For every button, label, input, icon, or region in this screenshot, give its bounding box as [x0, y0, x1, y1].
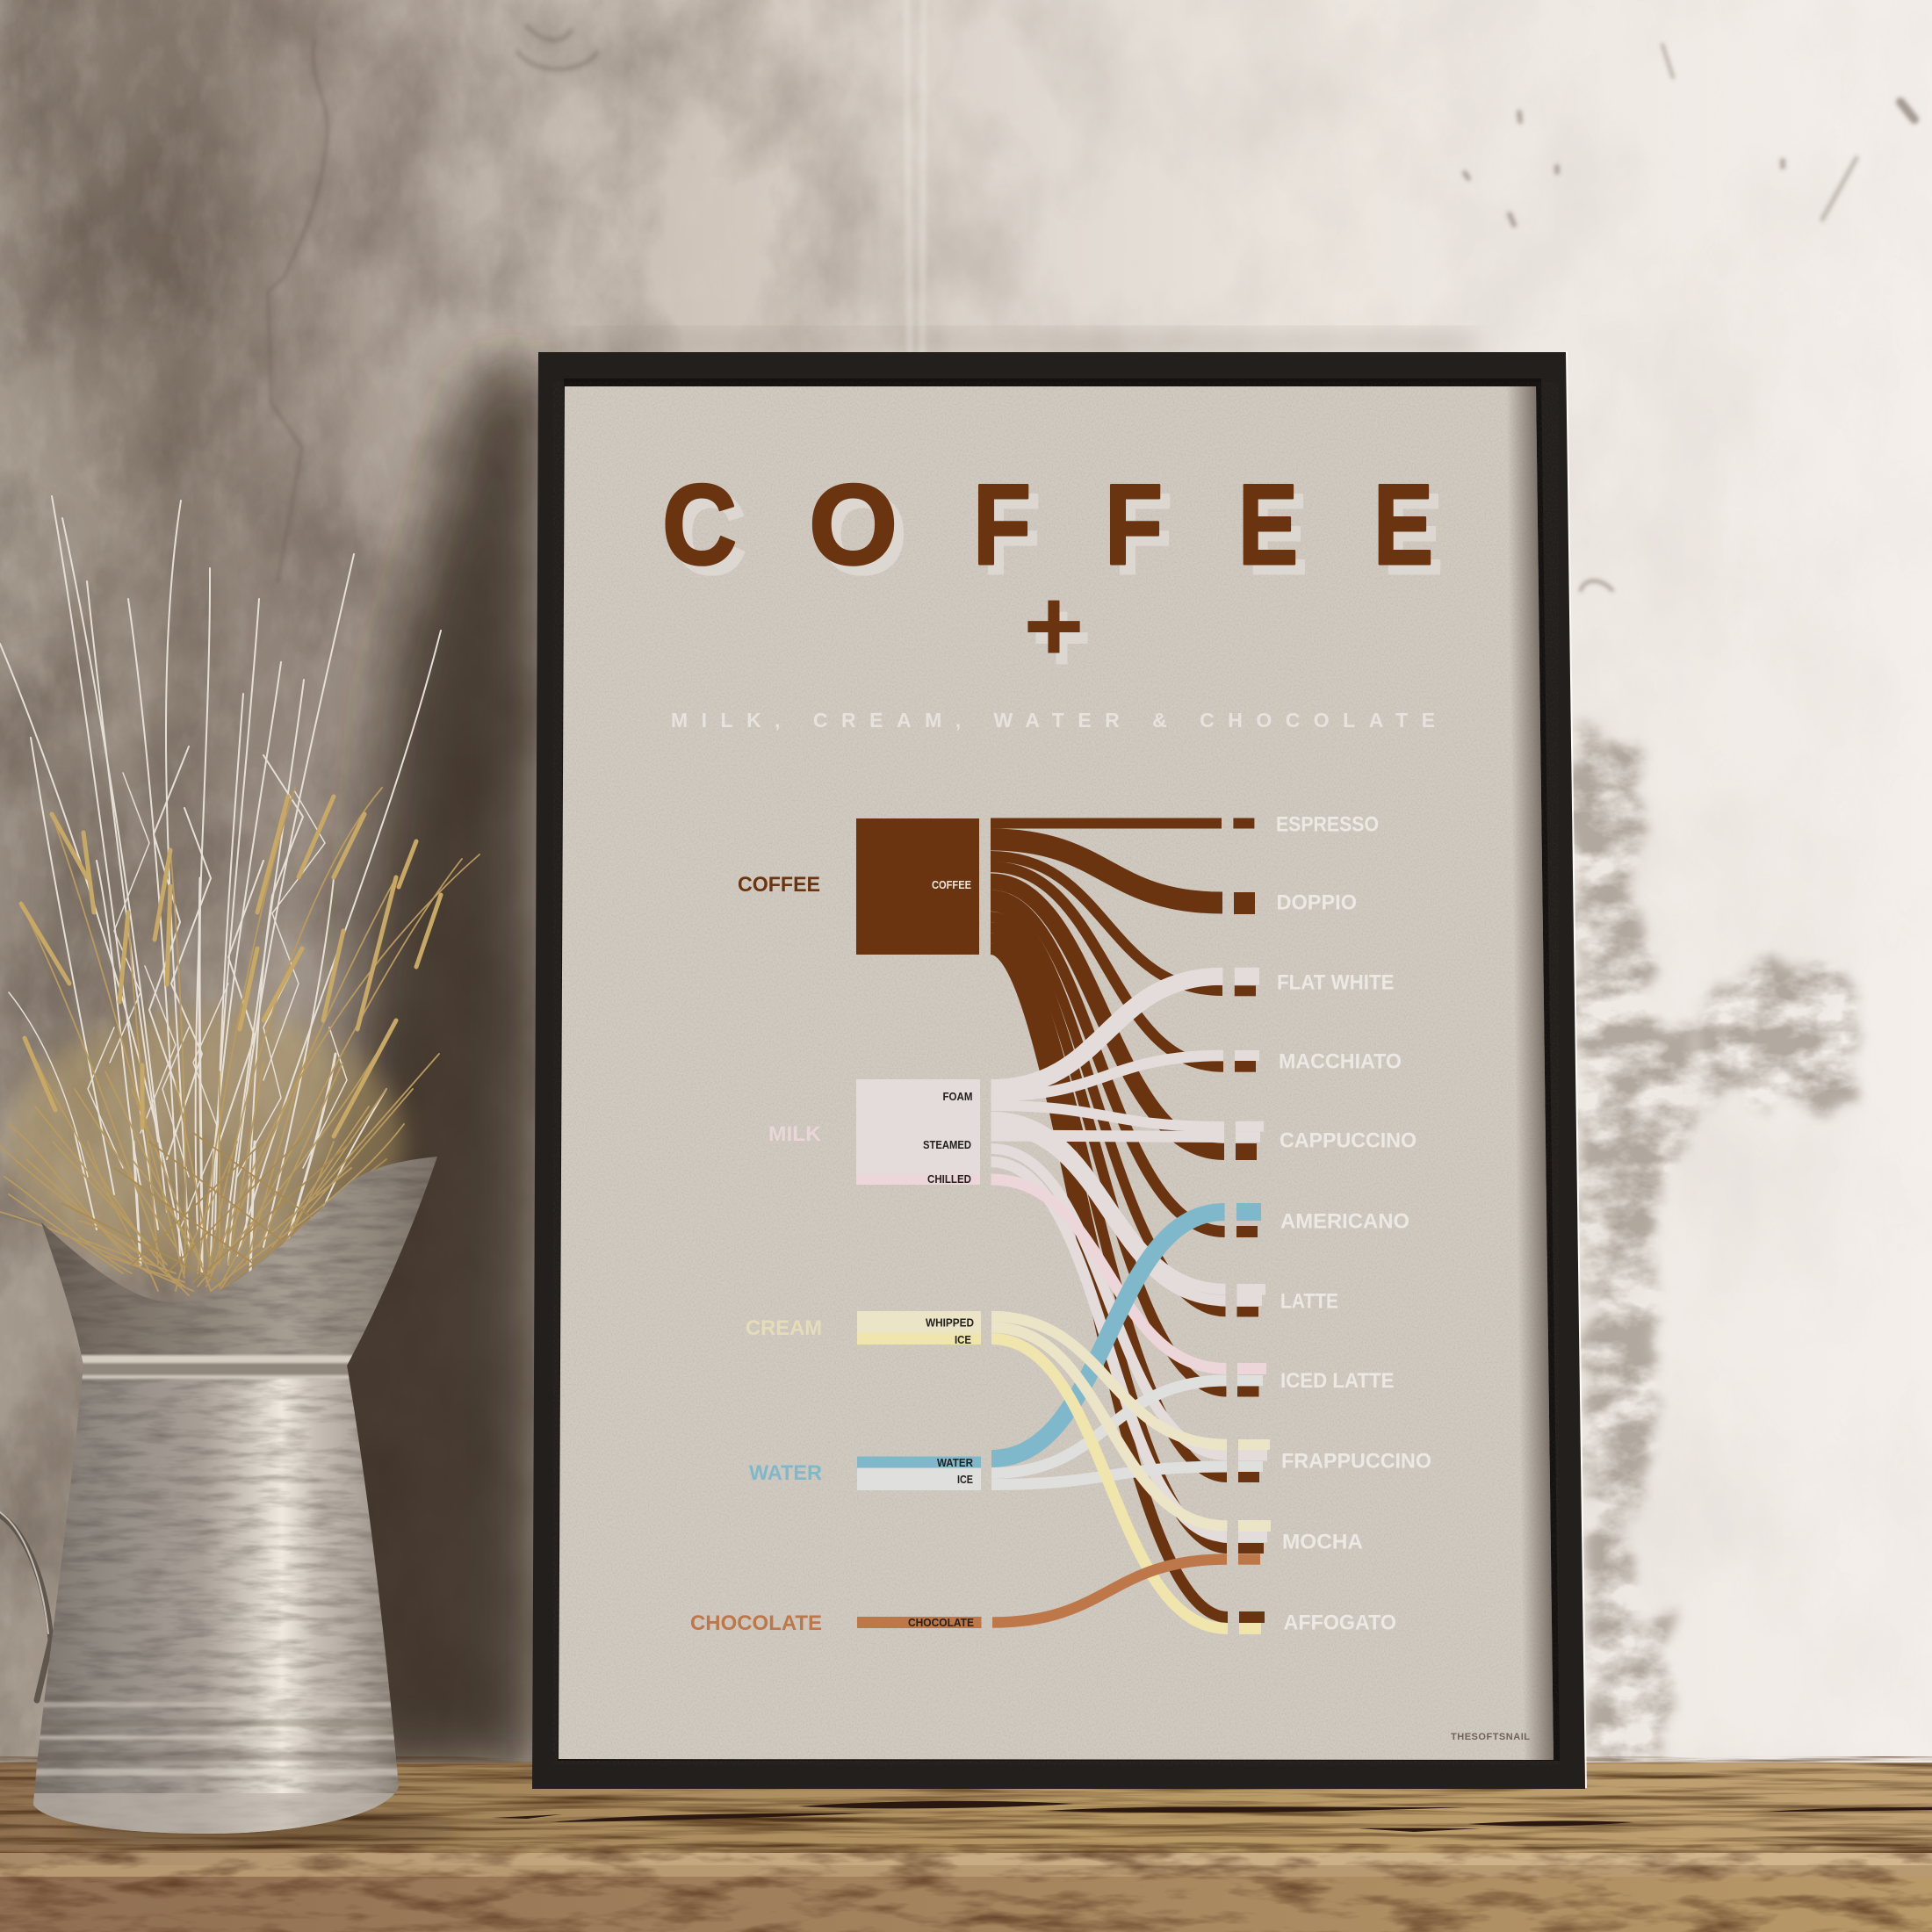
poster inner shadow — [1506, 386, 1554, 1760]
ingredient labels — [690, 873, 822, 1635]
golden straw — [0, 788, 479, 1295]
poster paper grain — [559, 386, 1554, 1760]
wall stains right of frame — [1573, 716, 1857, 1763]
source node: cream: ICE — [955, 1333, 971, 1346]
title: E — [1238, 460, 1298, 588]
source node: milk: STEAMED — [923, 1138, 971, 1151]
drink labels: ICED LATTE — [1280, 1369, 1395, 1393]
ribbons: coffee — [991, 824, 1228, 1618]
plus sign: + — [1024, 568, 1084, 684]
jug shadow on table — [61, 1816, 465, 1841]
source node: coffee — [856, 818, 979, 955]
target bars — [1233, 818, 1271, 1634]
ingredient labels: WATER — [749, 1461, 822, 1485]
white twigs — [0, 496, 441, 1273]
ribbon: water — [991, 1212, 1225, 1459]
poster paper — [559, 386, 1554, 1760]
wall cracks and chips — [268, 0, 1914, 590]
title: O — [809, 460, 898, 588]
frame outer — [532, 352, 1585, 1789]
jug ridge — [26, 1355, 404, 1776]
frame highlight edge — [1567, 351, 1586, 1788]
source node: cream: WHIPPED — [926, 1316, 974, 1330]
picture frame — [532, 351, 1586, 1789]
source node: chocolate — [857, 1616, 982, 1629]
drink labels: LATTE — [1280, 1289, 1338, 1314]
source node: milk: CHILLED — [927, 1172, 971, 1186]
title — [662, 460, 1433, 588]
shadow above frame — [562, 332, 1475, 353]
wooden table — [0, 1763, 1932, 1932]
metal jug with dried grass — [0, 496, 479, 1844]
source node: coffee: COFFEE — [932, 878, 971, 891]
ingredient labels: MILK — [768, 1122, 822, 1146]
drink labels: FLAT WHITE — [1277, 971, 1395, 994]
wood grain — [0, 1763, 1932, 1853]
ribbons: cream — [991, 1316, 1228, 1628]
subtitle: MILK, CREAM, WATER & CHOCOLATE — [671, 709, 1435, 732]
jug body — [33, 1366, 399, 1834]
source node: water — [857, 1456, 981, 1490]
jug decorative bands — [26, 1702, 404, 1707]
drink labels: ESPRESSO — [1276, 813, 1379, 836]
source node: water: WATER — [937, 1456, 974, 1469]
ribbon: chocolate — [992, 1560, 1227, 1623]
drink labels: MACCHIATO — [1279, 1050, 1402, 1073]
wood cracks — [492, 1801, 1932, 1832]
ingredient labels: COFFEE — [738, 873, 820, 897]
drink labels: CAPPUCCINO — [1280, 1129, 1417, 1152]
grass haze behind stems — [9, 1010, 404, 1273]
drink labels: DOPPIO — [1277, 890, 1357, 915]
drink labels — [1276, 813, 1431, 1635]
jug flared neck — [41, 1157, 437, 1366]
source node: milk — [856, 1079, 980, 1186]
ribbon: chilled milk — [991, 1179, 1226, 1368]
drink labels: FRAPPUCCINO — [1281, 1449, 1431, 1474]
ingredient labels: CREAM — [746, 1316, 822, 1340]
title: C — [662, 460, 737, 588]
ribbons: milk — [991, 977, 1227, 1537]
jug handle — [0, 1215, 51, 1700]
wall stain: dark patch upper left — [0, 0, 342, 1080]
table lower board — [0, 1877, 1932, 1932]
source node: milk: FOAM — [943, 1090, 973, 1103]
golden wheat heads — [21, 797, 441, 1136]
jug metal texture — [33, 1167, 433, 1834]
ribbons: ice — [991, 1381, 1227, 1484]
drink labels: AFFOGATO — [1284, 1611, 1396, 1635]
source node: water: ICE — [957, 1473, 973, 1486]
source node: cream — [857, 1311, 981, 1346]
title: F — [973, 460, 1031, 588]
drink labels: MOCHA — [1282, 1530, 1363, 1554]
sankey chart — [690, 813, 1431, 1635]
title: E — [1373, 460, 1433, 588]
drink labels: AMERICANO — [1280, 1210, 1409, 1233]
ingredient labels: CHOCOLATE — [690, 1611, 822, 1635]
title: F — [1105, 460, 1163, 588]
frame shadow on wall — [255, 369, 544, 1774]
frame inner recess — [558, 378, 1560, 1761]
watermark: THESOFTSNAIL — [1451, 1732, 1530, 1742]
source node: chocolate: CHOCOLATE — [908, 1616, 974, 1629]
table front lip — [0, 1853, 1932, 1865]
poster — [559, 386, 1554, 1760]
